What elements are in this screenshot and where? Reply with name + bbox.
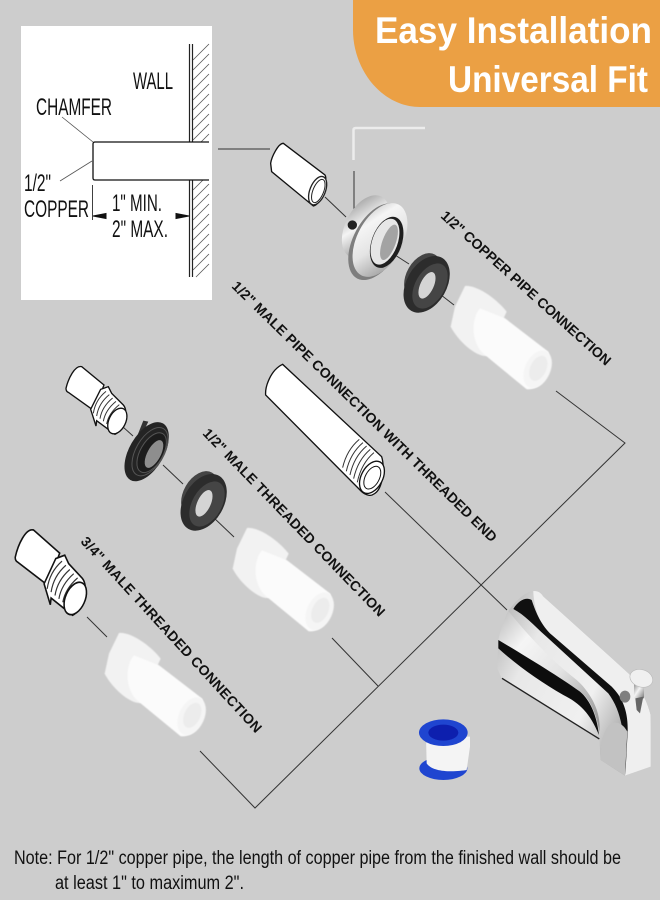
note [14,848,621,894]
threaded label half inch: 1/2" MALE THREADED CONNECTION [200,425,388,620]
male pipe label: 1/2" MALE PIPE CONNECTION WITH THREADED END [229,278,500,545]
connector lines [87,149,625,808]
threaded black adapter [115,415,178,489]
copper pipe piece [271,143,330,207]
label: chamfer: CHAMFER [36,94,112,121]
label: half inch copper: 1/2" [24,170,51,197]
threaded pipe large [15,530,91,619]
black ring lower [171,465,236,539]
title: easy installation: Easy Installation [375,10,652,51]
label: wall: WALL [133,68,173,95]
label: length range [112,190,168,243]
label: half inch copper [24,170,89,223]
label: half inch copper: COPPER [24,196,89,223]
chrome collar [332,187,419,289]
panel: wall installation diagram [21,26,212,300]
label: length range: 2" MAX. [112,216,168,243]
pipe in wall [93,142,209,180]
chrome tub spout [497,591,655,776]
white fitting top [451,286,558,393]
note: at least 1" to maximum 2". [55,873,244,894]
hex key [354,128,425,160]
threaded pipe short [66,367,131,437]
white fitting bottom [105,633,212,740]
long threaded pipe [266,364,390,498]
white fitting middle [233,528,340,635]
leader lines [60,117,93,181]
copper label: 1/2" COPPER PIPE CONNECTION [438,207,614,368]
threaded label three quarter: 3/4" MALE THREADED CONNECTION [78,533,265,736]
dimension arrows [92,185,189,220]
label: length range: 1" MIN. [112,190,162,217]
ptfe tape roll [419,719,470,780]
title badge [353,0,660,107]
black ring [394,247,459,321]
